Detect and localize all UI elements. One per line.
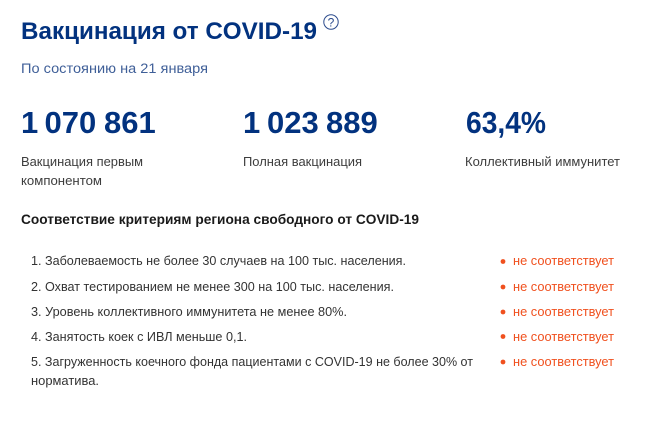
criterion 5	[31, 354, 473, 388]
stat: first component vaccination	[21, 105, 156, 188]
stat: first component vaccination: Вакцинация первым	[21, 154, 143, 169]
criterion 5: норматива.	[31, 373, 99, 388]
stat: full vaccination: 1	[243, 105, 260, 140]
stat: full vaccination	[243, 105, 378, 169]
criterion 1: 1. Заболеваемость не более 30 случаев на 100 тыс. населения.	[31, 253, 406, 268]
criterion 5: 5. Загруженность коечного фонда пациентами с COVID-19 не более 30% от	[31, 354, 473, 369]
stat: first component vaccination: 861	[104, 105, 156, 140]
stat: full vaccination: Полная вакцинация	[243, 154, 362, 169]
stat: herd immunity	[465, 105, 620, 169]
icon: question mark help	[324, 15, 338, 30]
status 5: не соответствует	[513, 354, 614, 369]
stat: first component vaccination: 070	[44, 105, 96, 140]
title: Вакцинация от COVID-19	[21, 18, 317, 45]
icon: question mark help: ?	[328, 16, 335, 30]
stat: herd immunity: 63,4%	[466, 105, 546, 140]
criterion 3: 3. Уровень коллективного иммунитета не менее 80%.	[31, 304, 347, 319]
status 2: не соответствует	[513, 279, 614, 294]
stat: first component vaccination: 1	[21, 105, 38, 140]
stat: herd immunity: Коллективный иммунитет	[465, 154, 620, 169]
status 1: не соответствует	[513, 253, 614, 268]
criteria list	[31, 253, 473, 388]
status list	[501, 253, 614, 369]
status 3: не соответствует	[513, 304, 614, 319]
stat: full vaccination: 889	[326, 105, 378, 140]
criterion 2: 2. Охват тестированием не менее 300 на 100 тыс. населения.	[31, 279, 394, 294]
stat: first component vaccination: компонентом	[21, 173, 102, 188]
heading: criteria: Соответствие критериям региона свободного от COVID-19	[21, 211, 419, 227]
status 4: не соответствует	[513, 329, 614, 344]
criterion 4: 4. Занятость коек с ИВЛ меньше 0,1.	[31, 329, 247, 344]
subtitle: date: По состоянию на 21 января	[21, 61, 208, 76]
stat: full vaccination: 023	[267, 105, 319, 140]
